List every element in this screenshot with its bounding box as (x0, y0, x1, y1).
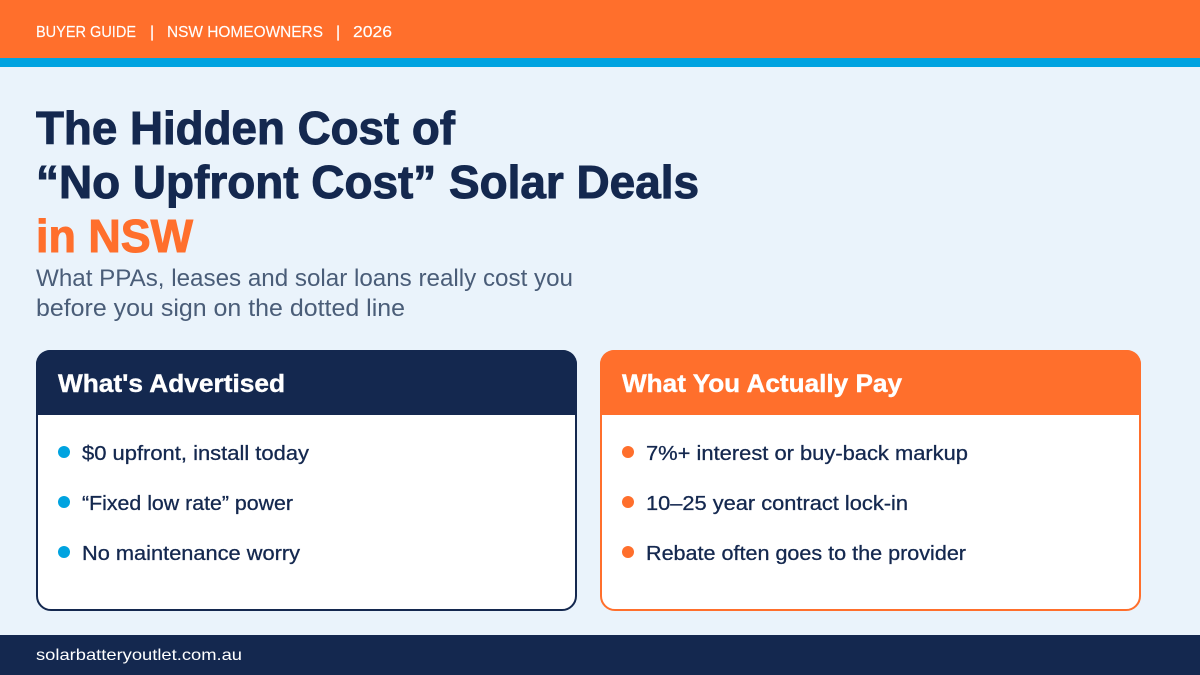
footer (0, 635, 1200, 675)
top banner: NSW HOMEOWNERS (167, 24, 323, 41)
list item: interest: 7%+ interest or buy-back markup (646, 443, 968, 465)
top banner: | (150, 24, 154, 41)
panel: what's advertised (36, 350, 577, 610)
top banner: | (336, 24, 340, 41)
title: The Hidden Cost of (36, 102, 456, 154)
list item: no maintenance: No maintenance worry (82, 543, 300, 565)
subtitle (36, 265, 573, 322)
panel header: what's advertised: What's Advertised (58, 370, 285, 398)
panel header: what you actually pay: What You Actually Pay (622, 370, 902, 398)
list item: contract lock-in: 10–25 year contract lock-in (646, 493, 908, 515)
list item: $0 upfront: $0 upfront, install today (82, 443, 309, 465)
panel: what you actually pay (600, 350, 1141, 610)
top banner: BUYER GUIDE (36, 24, 136, 41)
subtitle: before you sign on the dotted line (36, 295, 405, 322)
list item: fixed low rate: “Fixed low rate” power (82, 493, 293, 515)
footer: solarbatteryoutlet.com.au (36, 647, 242, 664)
panel header: what's advertised (36, 350, 577, 415)
subtitle: What PPAs, leases and solar loans really cost you (36, 265, 573, 292)
title: “No Upfront Cost” Solar Deals (36, 156, 699, 208)
top banner (0, 0, 1200, 67)
top banner: 2026 (353, 24, 392, 41)
title: in NSW (36, 210, 194, 262)
title (36, 102, 699, 262)
panel header: what you actually pay (600, 350, 1141, 415)
list item: rebate: Rebate often goes to the provider (646, 543, 966, 565)
